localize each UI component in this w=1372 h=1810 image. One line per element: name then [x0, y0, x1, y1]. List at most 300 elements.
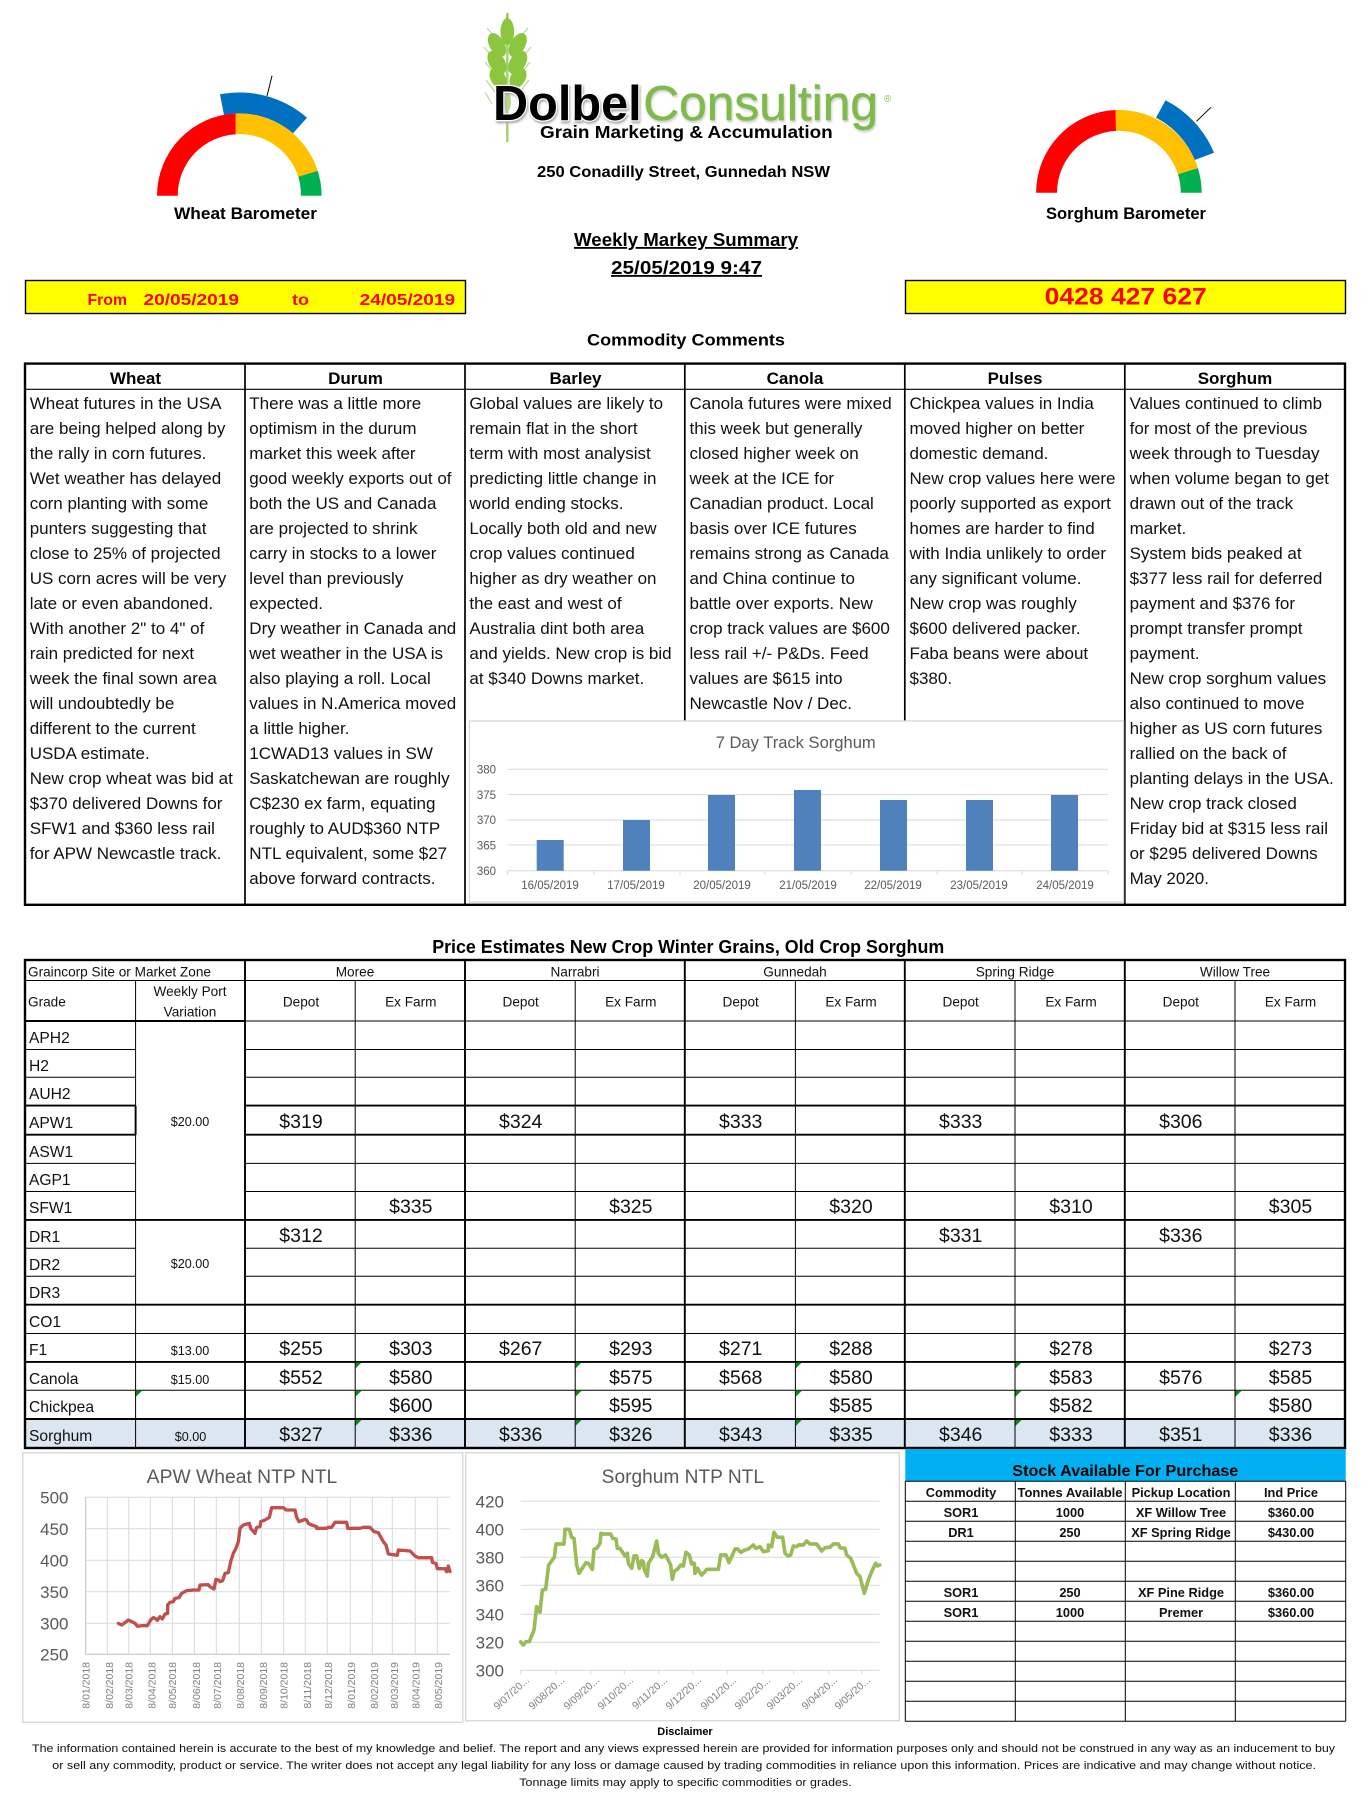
line chart: APW wheat NTP NTL: 8/01/2018 [80, 1662, 92, 1709]
column headers: Pulses [988, 369, 1042, 388]
logo: Dolbel Consulting: ® [884, 94, 892, 105]
line chart: APW wheat NTP NTL: 8/03/2018 [124, 1662, 136, 1709]
comment: canola: Canadian product. Local [690, 494, 874, 513]
comment: canola: Newcastle Nov / Dec. [690, 694, 852, 713]
comment: durum: a little higher. [249, 719, 349, 738]
comment: wheat: week the final sown area [29, 669, 217, 688]
comment: durum: values in N.America moved [249, 694, 456, 713]
column headers: Wheat [110, 369, 161, 388]
comment: barley: Locally both old and new [469, 519, 657, 538]
address: 250 Conadilly Street, Gunnedah NSW [537, 164, 831, 181]
comment: barley: and yields. New crop is bid [469, 644, 672, 663]
comment: canola: and China continue to [690, 569, 855, 588]
grade labels: AGP1 [29, 1172, 71, 1189]
prices: F1: $278 [1049, 1338, 1093, 1360]
logo: Dolbel Consulting: Dolbel [493, 77, 642, 131]
disclaimer: Disclaimer [657, 1726, 713, 1738]
comment: pulses: any significant volume. [910, 569, 1081, 588]
prices: F1: $273 [1269, 1338, 1312, 1360]
comment: sorghum: rallied on the back of [1130, 744, 1287, 763]
column headers: Canola [767, 369, 824, 388]
line chart: APW wheat NTP NTL: 8/06/2018 [191, 1662, 203, 1709]
line chart: sorghum NTP NTL: 9/07/20... [491, 1674, 532, 1713]
grade labels: APW1 [29, 1115, 73, 1132]
prices: canola: $580 [389, 1367, 433, 1389]
line chart: sorghum NTP NTL: 9/11/20... [630, 1674, 670, 1712]
line chart: APW wheat NTP NTL: 8/05/2019 [433, 1662, 445, 1709]
grade labels: Sorghum [29, 1428, 92, 1445]
comment: barley: predicting little change in [469, 469, 657, 488]
disclaimer: The information contained herein is accurate to the best of my knowledge and belief. The report and any views expressed herein are provided for information purposes only and should not be construed in any way as an inducement to buy [32, 1743, 1335, 1755]
comment: durum: There was a little more [249, 394, 421, 413]
stock table text: DR1 [948, 1525, 974, 1540]
table headers: Ex Farm [1045, 994, 1097, 1010]
line chart: sorghum NTP NTL: 300 [476, 1662, 504, 1680]
prices: F1: $288 [829, 1338, 873, 1360]
line series: sorghum price [521, 1529, 880, 1645]
prices: APW1 [279, 1111, 1202, 1133]
prices: sorghum: $326 [609, 1424, 652, 1446]
table headers: Narrabri [550, 964, 600, 980]
prices: APW1: $333 [719, 1111, 762, 1133]
comment: canola: less rail +/- P&Ds. Feed [690, 644, 869, 663]
prices: sorghum: $336 [389, 1424, 432, 1446]
comment: sorghum: for most of the previous [1130, 419, 1307, 438]
stock table text: $360.00 [1268, 1505, 1314, 1520]
comment: pulses: moved higher on better [910, 419, 1085, 438]
phone number box [906, 280, 1346, 314]
bar chart: 7 day track sorghum [470, 721, 1124, 902]
prices: chickpea: $585 [829, 1395, 873, 1417]
date range box: From [88, 292, 127, 309]
column headers: Sorghum [1198, 369, 1272, 388]
table headers: Depot [1163, 994, 1199, 1010]
comment: barley: Australia dint both area [469, 619, 645, 638]
stock table text: Tonnes Available [1018, 1485, 1122, 1500]
weekly port variation: $15.00 [171, 1373, 209, 1387]
prices: canola: $575 [609, 1367, 653, 1389]
table headers: Depot [723, 994, 759, 1010]
comment: wheat: are being helped along by [30, 419, 226, 438]
comment: sorghum: also continued to move [1130, 694, 1304, 713]
comment indicators [136, 1362, 1242, 1426]
grade labels: SFW1 [29, 1200, 72, 1217]
stock table text: 250 [1059, 1585, 1081, 1600]
line chart: APW wheat NTP NTL: 500 [40, 1488, 68, 1508]
comment: sorghum: drawn out of the track [1130, 494, 1294, 513]
comment: durum: Dry weather in Canada and [249, 619, 456, 638]
table headers: Variation [164, 1004, 216, 1020]
disclaimer: or sell any commodity, product or service. The writer does not accept any legal liability for any loss or damage caused by trading commodities in reliance upon this information. Prices are indicative and may change without notice. [52, 1760, 1316, 1772]
prices: DR1: $336 [1159, 1225, 1202, 1247]
prices: SFW1: $325 [609, 1196, 653, 1218]
comment: wheat: for APW Newcastle track. [30, 844, 221, 863]
prices: F1: $303 [389, 1338, 432, 1360]
prices: sorghum: $335 [829, 1424, 873, 1446]
line chart: APW wheat NTP NTL: 300 [40, 1614, 68, 1634]
comment: sorghum: Friday bid at $315 less rail [1130, 819, 1328, 838]
comment: durum: roughly to AUD$360 NTP [249, 819, 440, 838]
line chart: APW wheat NTP NTL: 8/02/2019 [369, 1662, 381, 1709]
prices: canola [279, 1367, 1312, 1389]
comment: pulses: with India unlikely to order [908, 544, 1106, 563]
heading: weekly summary: 25/05/2019 9:47 [611, 258, 762, 278]
prices: chickpea: $595 [609, 1395, 653, 1417]
line chart: APW wheat NTP NTL: 8/12/2018 [323, 1662, 335, 1709]
bar chart: 7 day track sorghum: 380 [477, 764, 496, 776]
comment: wheat: corn planting with some [30, 494, 208, 513]
stock table text: Premer [1159, 1605, 1203, 1620]
table headers: Grade [28, 994, 66, 1010]
line chart: APW wheat NTP NTL: 450 [40, 1520, 68, 1539]
prices: DR1: $312 [279, 1225, 323, 1247]
grade labels: Canola [29, 1371, 79, 1388]
prices: SFW1: $335 [389, 1196, 433, 1218]
icon: wheat ear [483, 12, 531, 142]
prices: F1: $267 [499, 1338, 542, 1360]
line chart: sorghum NTP NTL: 380 [476, 1548, 504, 1568]
comment: wheat: rain predicted for next [30, 644, 194, 663]
stock table text: SOR1 [944, 1605, 978, 1620]
table headers: Willow Tree [1200, 964, 1270, 980]
line chart: APW wheat NTP NTL: 8/07/2018 [212, 1662, 224, 1709]
table headers: Ex Farm [825, 994, 877, 1010]
stock table text: XF Pine Ridge [1138, 1585, 1224, 1600]
comment: barley: world ending stocks. [468, 494, 623, 513]
comment: sorghum: week through to Tuesday [1129, 444, 1320, 463]
table headers: Ex Farm [385, 994, 436, 1010]
comment: durum: NTL equivalent, some $27 [249, 844, 447, 863]
logo: Dolbel Consulting: Consulting [643, 77, 878, 131]
heading: commodity comments: Commodity Comments [587, 330, 785, 350]
grade labels: H2 [29, 1058, 49, 1075]
table headers: Weekly Port [153, 984, 227, 999]
comment: durum: market this week after [249, 444, 416, 463]
comment: wheat: late or even abandoned. [30, 594, 213, 613]
stock table text: Pickup Location [1132, 1485, 1231, 1500]
prices: chickpea: $582 [1049, 1395, 1093, 1417]
line chart: APW wheat NTP NTL: 8/04/2019 [410, 1662, 422, 1709]
comment: sorghum: New crop sorghum values [1130, 669, 1326, 688]
logo: Dolbel Consulting [483, 12, 892, 142]
grade labels: APH2 [29, 1030, 70, 1047]
comment: sorghum: payment and $376 for [1130, 594, 1295, 613]
weekly port variation: $13.00 [171, 1344, 209, 1358]
heading: price estimates: Price Estimates New Crop Winter Grains, Old Crop Sorghum [432, 937, 944, 957]
line chart: sorghum NTP NTL: 320 [476, 1634, 504, 1652]
phone number box: 0428 427 627 [1045, 284, 1207, 311]
line series: wheat price [118, 1508, 450, 1626]
line chart: sorghum NTP NTL: 360 [476, 1576, 504, 1596]
bar chart: 7 day track sorghum: 7 Day Track Sorghum [716, 733, 876, 752]
comment: durum: expected. [249, 594, 323, 613]
prices: SFW1: $320 [829, 1196, 873, 1218]
line chart: sorghum NTP NTL: 9/04/20... [799, 1674, 840, 1713]
comment: wheat: different to the current [30, 719, 196, 738]
grade labels: ASW1 [29, 1144, 73, 1161]
comment: canola: closed higher week on [690, 444, 859, 463]
comment: wheat: punters suggesting that [30, 519, 207, 538]
prices: sorghum: $346 [939, 1424, 982, 1446]
stock table text: 1000 [1056, 1505, 1084, 1520]
line chart: sorghum NTP NTL: Sorghum NTP NTL [602, 1467, 764, 1488]
comment: sorghum: $377 less rail for deferred [1130, 569, 1322, 588]
prices: SFW1: $310 [1049, 1196, 1093, 1218]
table headers: Depot [503, 994, 539, 1010]
comment: pulses: Faba beans were about [910, 644, 1088, 663]
table headers: Ex Farm [1265, 994, 1316, 1010]
comment: durum: are projected to shrink [249, 519, 418, 538]
comment: wheat: New crop wheat was bid at [30, 769, 233, 788]
comment: wheat: With another 2" to 4" of [30, 619, 205, 638]
prices: sorghum [279, 1424, 1312, 1446]
grade labels: CO1 [29, 1314, 61, 1331]
comment: barley: the east and west of [469, 594, 622, 613]
comment: durum: above forward contracts. [249, 869, 435, 888]
line chart: APW wheat NTP NTL: 8/02/2018 [104, 1662, 116, 1709]
comment: durum: optimism in the durum [249, 419, 417, 438]
comment: pulses: domestic demand. [910, 444, 1048, 463]
stock table text: XF Spring Ridge [1131, 1525, 1231, 1540]
prices: canola: $583 [1049, 1367, 1093, 1389]
line chart: APW wheat NTP NTL: 8/01/2019 [346, 1662, 358, 1709]
line chart: APW wheat NTP NTL: 350 [40, 1583, 68, 1602]
line chart: APW wheat NTP NTL: 250 [40, 1646, 68, 1664]
bar chart: 7 day track sorghum: 16/05/2019 [521, 880, 579, 892]
stock table text: SOR1 [944, 1505, 978, 1520]
prices: SFW1: $305 [1269, 1196, 1312, 1218]
grade labels: Chickpea [29, 1399, 94, 1416]
date range box: to [292, 292, 309, 309]
line chart: APW wheat NTP NTL: APW Wheat NTP NTL [147, 1467, 337, 1488]
table headers: Depot [943, 994, 979, 1010]
prices: APW1: $324 [499, 1111, 543, 1133]
bar chart: 7 day track sorghum: 22/05/2019 [864, 880, 922, 892]
comment: sorghum: or $295 delivered Downs [1130, 844, 1318, 863]
prices: canola: $552 [279, 1367, 323, 1389]
prices: F1: $271 [719, 1338, 762, 1360]
line chart: sorghum NTP NTL: 9/12/20... [663, 1674, 704, 1713]
table headers: Moree [336, 964, 374, 980]
prices: chickpea: $600 [389, 1395, 433, 1417]
weekly port variation: $20.00 [171, 1115, 209, 1129]
prices: sorghum: $327 [279, 1424, 323, 1446]
disclaimer: Tonnage limits may apply to specific commodities or grades. [519, 1777, 852, 1789]
prices: sorghum: $336 [499, 1424, 542, 1446]
comment: pulses: homes are harder to find [910, 519, 1095, 538]
comment: wheat: $370 delivered Downs for [30, 794, 223, 813]
stock table text: $360.00 [1268, 1585, 1314, 1600]
column headers: Durum [328, 369, 383, 388]
comment: barley: Global values are likely to [469, 394, 663, 413]
prices: canola: $576 [1159, 1367, 1202, 1389]
stock table text: Ind Price [1264, 1485, 1318, 1500]
table headers: Gunnedah [763, 964, 827, 980]
prices: sorghum: $351 [1159, 1424, 1202, 1446]
line chart: APW wheat NTP NTL [23, 1453, 463, 1722]
comment: barley: term with most analysist [469, 444, 651, 463]
date range box: 24/05/2019 [360, 292, 456, 309]
stock table text [926, 1485, 1318, 1620]
line chart: sorghum NTP NTL: 9/09/20... [561, 1674, 602, 1713]
gauge: sorghum barometer [1036, 100, 1214, 223]
line chart: sorghum NTP NTL: 9/08/20... [526, 1674, 567, 1713]
table headers: Ex Farm [605, 994, 656, 1010]
prices: DR1 [279, 1225, 1202, 1247]
line chart: APW wheat NTP NTL: 8/04/2018 [146, 1662, 158, 1709]
prices: SFW1 [389, 1196, 1312, 1218]
comment: pulses: poorly supported as export [910, 494, 1111, 513]
comment: durum: wet weather in the USA is [248, 644, 443, 663]
comment: wheat: USDA estimate. [30, 744, 150, 763]
prices: APW1: $319 [279, 1111, 323, 1133]
weekly port variation: $0.00 [175, 1430, 206, 1444]
line chart: sorghum NTP NTL: 9/03/20... [764, 1674, 805, 1713]
stock table text: $360.00 [1268, 1605, 1314, 1620]
comment: durum: also playing a roll. Local [249, 669, 431, 688]
comment: sorghum: May 2020. [1130, 869, 1209, 888]
bar chart: 7 day track sorghum: 360 [477, 866, 496, 878]
bar chart: 7 day track sorghum: 17/05/2019 [607, 880, 665, 892]
comment: durum: Saskatchewan are roughly [249, 769, 450, 788]
comment: wheat: close to 25% of projected [30, 544, 221, 563]
weekly port variation: $20.00 [171, 1257, 209, 1271]
bar chart: 7 day track sorghum: 20/05/2019 [693, 880, 751, 892]
stock table text: Commodity [926, 1485, 997, 1500]
comment: canola: Canola futures were mixed [690, 394, 892, 413]
table headers: Graincorp Site or Market Zone [28, 964, 211, 980]
comment: pulses: New crop values here were [910, 469, 1115, 488]
gauge: sorghum barometer: Sorghum Barometer [1046, 204, 1206, 223]
comment: barley: remain flat in the short [469, 419, 638, 438]
comment: barley: crop values continued [469, 544, 635, 563]
bar chart: 7 day track sorghum: 24/05/2019 [1036, 880, 1094, 892]
column headers: Barley [550, 369, 602, 388]
gauge: wheat barometer: Wheat Barometer [174, 204, 317, 223]
prices: DR1: $331 [939, 1225, 982, 1247]
table headers: Depot [283, 994, 319, 1010]
comment: sorghum: higher as US corn futures [1130, 719, 1322, 738]
comment: durum: level than previously [249, 569, 404, 588]
weekly port variation [171, 1115, 209, 1444]
comment: durum: 1CWAD13 values in SW [249, 744, 433, 763]
comment: pulses: $600 delivered packer. [910, 619, 1081, 638]
prices: sorghum: $336 [1269, 1424, 1312, 1446]
prices: F1: $255 [279, 1338, 323, 1360]
prices: sorghum: $333 [1049, 1424, 1093, 1446]
logo: Dolbel Consulting: Grain Marketing & Accumulation [540, 122, 833, 142]
date range box: 20/05/2019 [144, 292, 239, 309]
line chart: APW wheat NTP NTL: 8/11/2018 [302, 1662, 314, 1709]
column headers [110, 369, 1272, 388]
comment: wheat: will undoubtedly be [29, 694, 174, 713]
prices: APW1: $333 [939, 1111, 982, 1133]
line chart: sorghum NTP NTL: 340 [476, 1606, 504, 1624]
gauge: wheat barometer [157, 76, 322, 223]
comment: canola: battle over exports. New [690, 594, 874, 613]
line chart: APW wheat NTP NTL: 8/08/2018 [235, 1662, 247, 1709]
prices: canola: $585 [1269, 1367, 1312, 1389]
stock header band [905, 1449, 1346, 1481]
bar chart: 7 day track sorghum: 370 [477, 815, 496, 827]
grade labels: DR1 [29, 1229, 60, 1246]
comment: canola: values are $615 into [690, 669, 843, 688]
line chart: sorghum NTP NTL: 420 [476, 1492, 504, 1512]
comment: wheat: the rally in corn futures. [30, 444, 206, 463]
comment: barley: at $340 Downs market. [469, 669, 644, 688]
line chart: sorghum NTP NTL: 9/01/20... [698, 1674, 739, 1713]
comment: durum: both the US and Canada [249, 494, 437, 513]
line chart: APW wheat NTP NTL: 8/03/2019 [389, 1662, 401, 1709]
panel: stock available for purchase [905, 1449, 1346, 1721]
line chart: sorghum NTP NTL: 9/10/20... [595, 1674, 636, 1713]
panel: commodity comments table [25, 364, 1345, 905]
line chart: APW wheat NTP NTL: 8/05/2018 [167, 1662, 179, 1709]
stock header band: Stock Available For Purchase [1012, 1463, 1238, 1480]
stock table text: XF Willow Tree [1136, 1505, 1226, 1520]
heading: weekly summary: Weekly Markey Summary [574, 230, 798, 250]
comment: canola: week at the ICE for [688, 469, 834, 488]
grade labels: AUH2 [29, 1086, 71, 1103]
table headers: Spring Ridge [976, 964, 1054, 980]
grade labels: DR2 [29, 1257, 60, 1274]
comment: sorghum: prompt transfer prompt [1130, 619, 1303, 638]
line chart: APW wheat NTP NTL: 8/09/2018 [258, 1662, 270, 1709]
comment: durum: C$230 ex farm, equating [249, 794, 435, 813]
comment: wheat: US corn acres will be very [30, 569, 227, 588]
panel: price estimates table [25, 960, 1345, 1448]
prices: F1 [279, 1338, 1312, 1360]
date range box [26, 280, 466, 314]
heading: weekly summary [574, 230, 798, 278]
prices: APW1: $306 [1159, 1111, 1202, 1133]
line chart: sorghum NTP NTL [466, 1453, 899, 1721]
comment: durum: good weekly exports out of [249, 469, 452, 488]
table headers [28, 964, 1316, 1020]
prices: canola: $580 [829, 1367, 873, 1389]
stock table text: 1000 [1056, 1605, 1084, 1620]
comment: barley: higher as dry weather on [469, 569, 657, 588]
comment: sorghum: payment. [1130, 644, 1200, 663]
bar chart: 7 day track sorghum: 23/05/2019 [950, 880, 1008, 892]
prices: chickpea: $580 [1269, 1395, 1312, 1417]
bar chart: 7 day track sorghum: 375 [477, 790, 496, 802]
grade labels [29, 1030, 94, 1445]
comment: sorghum: New crop track closed [1130, 794, 1297, 813]
comment: canola: basis over ICE futures [690, 519, 857, 538]
prices: chickpea [389, 1395, 1312, 1417]
stock table text: 250 [1059, 1525, 1081, 1540]
line chart: APW wheat NTP NTL: 400 [40, 1552, 68, 1570]
comment: durum: carry in stocks to a lower [249, 544, 437, 563]
comment: canola: this week but generally [690, 419, 863, 438]
prices: canola: $568 [719, 1367, 762, 1389]
bar chart: 7 day track sorghum: 21/05/2019 [779, 880, 837, 892]
line chart: sorghum NTP NTL: 9/02/20... [732, 1674, 773, 1713]
prices: sorghum: $343 [719, 1424, 762, 1446]
comment: wheat: SFW1 and $360 less rail [30, 819, 215, 838]
comment: wheat: Wet weather has delayed [30, 469, 221, 488]
comment: sorghum: planting delays in the USA. [1130, 769, 1334, 788]
comment: pulses: $380. [910, 669, 952, 688]
comment: sorghum: System bids peaked at [1130, 544, 1302, 563]
stock table text: SOR1 [944, 1585, 978, 1600]
bar chart: 7 day track sorghum: 365 [477, 840, 496, 852]
stock table text: $430.00 [1268, 1525, 1314, 1540]
comment: sorghum: Values continued to climb [1130, 394, 1322, 413]
comment: sorghum: market. [1130, 519, 1186, 538]
prices: F1: $293 [609, 1338, 652, 1360]
